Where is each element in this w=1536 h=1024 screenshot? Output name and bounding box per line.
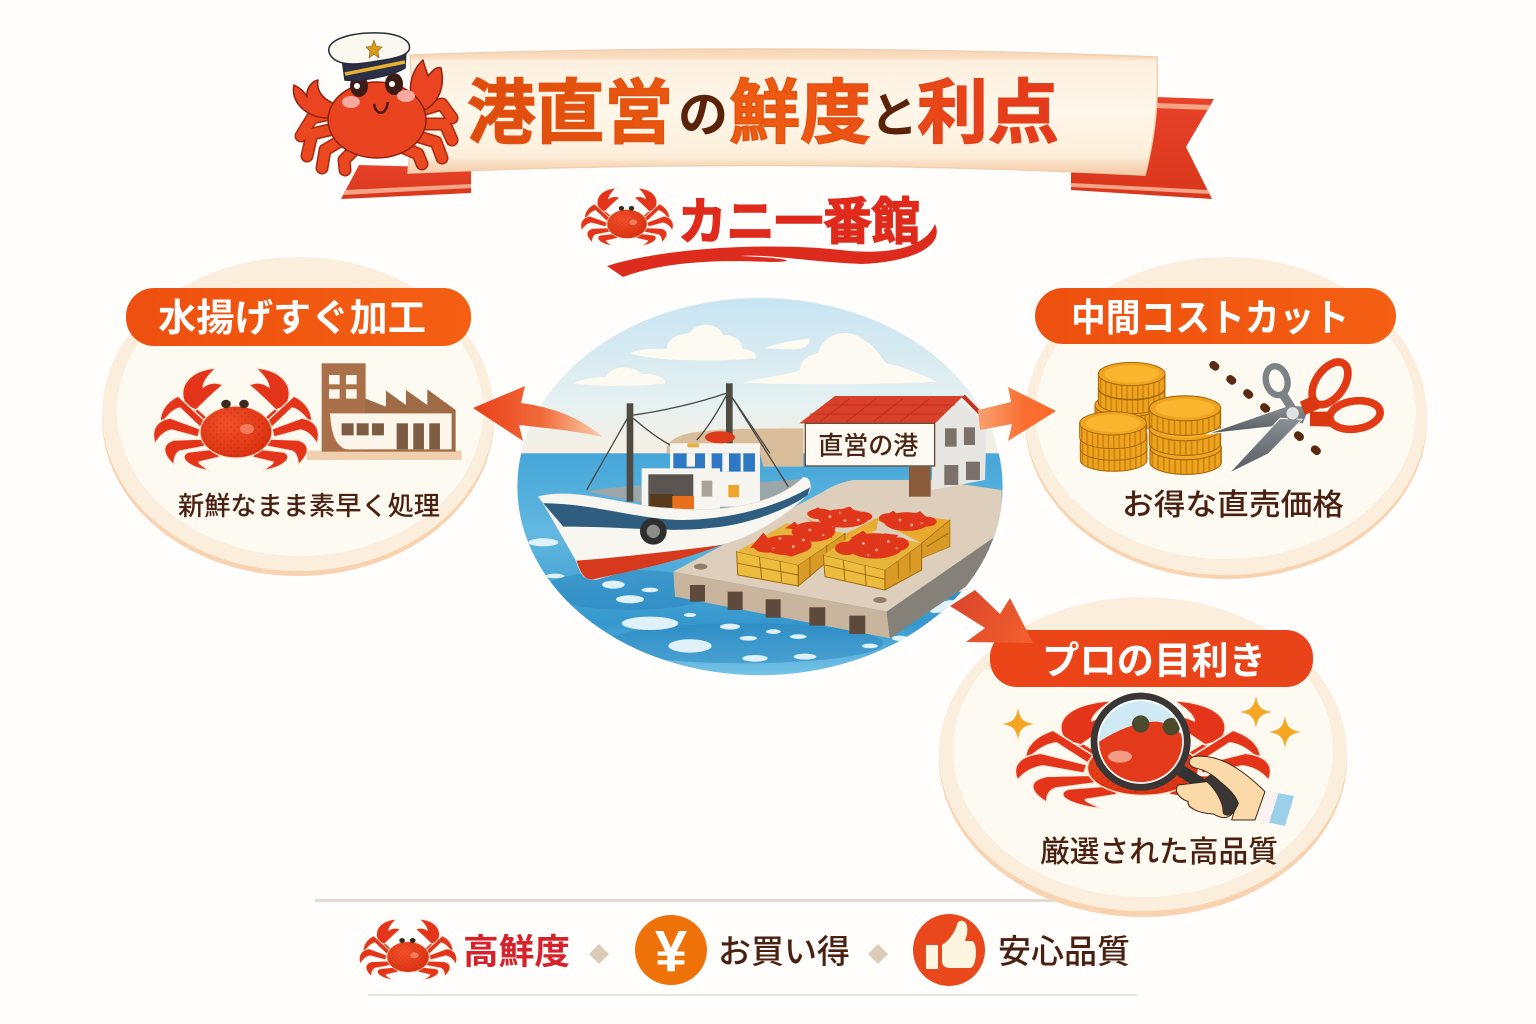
mascot body [328, 82, 426, 158]
icon: scissors [1207, 356, 1382, 473]
sea foam [528, 538, 980, 662]
sign: direct port [805, 423, 935, 466]
arrow: to expert panel [950, 590, 1033, 643]
boat deck [587, 478, 803, 509]
ribbon body [408, 49, 1158, 175]
sea shading [543, 567, 1000, 663]
boat hull [538, 477, 810, 579]
hand [1176, 756, 1265, 820]
footer item: quality [913, 914, 1130, 986]
central harbor illustration [510, 290, 1010, 680]
logo swoosh [607, 224, 937, 277]
brand logo [581, 188, 937, 277]
title text: と [870, 90, 918, 143]
panel heading: 水揚げすぐ加工 [158, 298, 426, 340]
title banner [341, 49, 1214, 199]
magnified crab [1097, 699, 1184, 782]
crab crates [737, 507, 950, 590]
panel heading [126, 288, 471, 346]
panel disc [102, 257, 494, 576]
icon: magnifier and hand [1090, 693, 1294, 826]
mascot hat [329, 33, 410, 80]
title text [467, 74, 1059, 152]
magnifier handle [1180, 770, 1237, 807]
panel disc [1025, 257, 1427, 579]
panel heading: プロの目利き [1042, 641, 1266, 683]
icon: crab [153, 368, 319, 471]
panel: cost cut [1025, 257, 1427, 579]
diamond separator [868, 944, 888, 964]
logo name: カニ一番館 [678, 194, 920, 250]
mascot claws [293, 80, 338, 118]
panel heading [990, 630, 1313, 687]
panel: expert selection [939, 597, 1347, 917]
dashed cut line [1213, 365, 1332, 463]
panel heading: 中間コストカット [1071, 298, 1349, 340]
arrow: to cost panel [978, 387, 1056, 441]
panel caption: 新鮮なまま素早く処理 [178, 491, 440, 521]
footer item: good value [635, 915, 850, 985]
icon: sparkles [1002, 696, 1301, 748]
title text: 利点 [917, 74, 1059, 152]
magnifier ring [1094, 696, 1187, 787]
title text: 港直営 [467, 74, 673, 152]
diamond separator [589, 944, 609, 964]
arrow: to processing panel [473, 386, 603, 441]
sign: direct port: 直営の港 [818, 433, 918, 461]
clouds [573, 325, 937, 386]
mascot legs outline [301, 104, 452, 170]
fishing boat [538, 383, 810, 579]
panel caption: 厳選された高品質 [1040, 836, 1278, 869]
crate back middle [803, 507, 878, 543]
icon: factory [307, 363, 462, 460]
footer item: freshness [359, 919, 570, 980]
crate front right [823, 530, 922, 590]
ribbon tail: left [341, 165, 471, 199]
ribbon tail: right [1071, 97, 1214, 199]
harbor building [799, 396, 992, 497]
crate front left [737, 522, 845, 586]
panel heading [1035, 288, 1396, 344]
icon: front right coin stack [1149, 396, 1221, 474]
pier [673, 480, 1002, 638]
boat masts and rigging [587, 383, 788, 502]
icon: coins and scissors [1080, 356, 1382, 474]
footer summary [315, 899, 1137, 996]
title text: 鮮度 [729, 74, 871, 152]
crate back right [877, 511, 950, 558]
footer item: freshness: 高鮮度 [463, 933, 570, 972]
sea [510, 453, 1010, 680]
panel: immediate processing [102, 257, 494, 576]
boat tire [640, 518, 667, 545]
boat cabin [642, 431, 760, 511]
icon: front left coin stack [1080, 412, 1147, 471]
icon: crab [1015, 701, 1271, 809]
sky [510, 290, 1010, 455]
icon: back coin stack [1095, 362, 1165, 430]
mascot legs [301, 104, 452, 170]
footer item: quality: 安心品質 [998, 933, 1130, 970]
panel disc [939, 597, 1347, 917]
logo crab icon [581, 188, 673, 246]
breakwater [667, 428, 803, 467]
panel caption: お得な直売価格 [1122, 489, 1344, 522]
mascot eyes and face [342, 73, 415, 108]
mascot: captain crab [293, 33, 452, 170]
shirt cuff [1256, 791, 1294, 826]
footer item: good value: お買い得 [718, 933, 850, 970]
title text: の [678, 87, 728, 143]
footer item: good value: ¥ [655, 919, 687, 984]
